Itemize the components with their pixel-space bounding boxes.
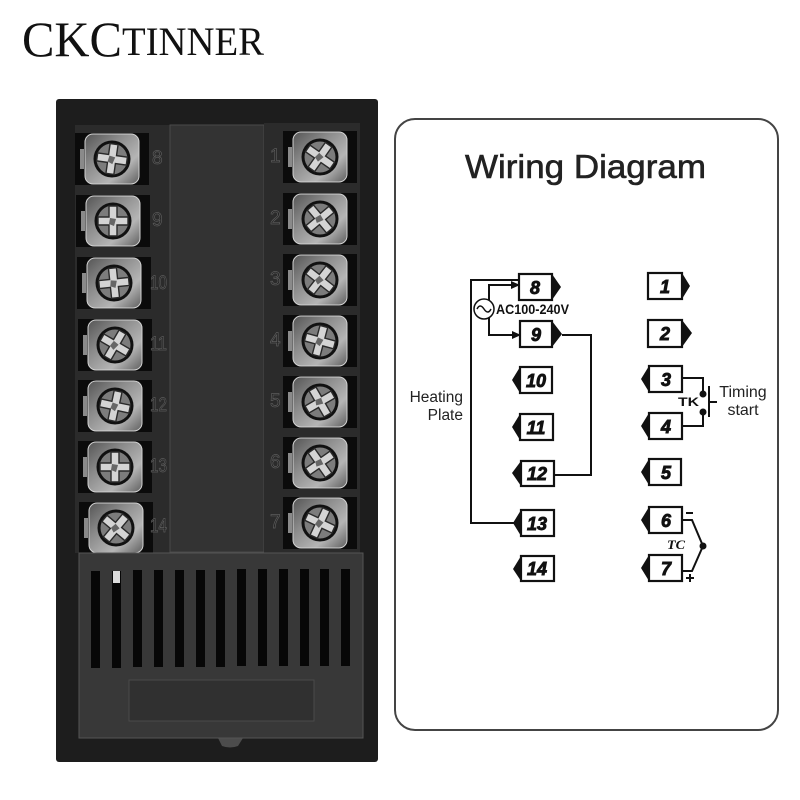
terminal 1 bbox=[648, 273, 690, 299]
right terminal strip: 1 bbox=[270, 146, 281, 167]
thermocouple input bbox=[667, 513, 706, 582]
terminal 5: 5 bbox=[661, 463, 672, 483]
wiring diagram panel bbox=[395, 119, 778, 730]
terminal 11: 11 bbox=[527, 418, 545, 438]
right terminal strip: 4 bbox=[270, 330, 281, 351]
terminal 13: 13 bbox=[527, 514, 547, 534]
terminal 14 bbox=[513, 556, 554, 581]
timing start switch: Timing bbox=[719, 384, 767, 401]
controller rear housing bbox=[56, 99, 378, 762]
AC supply wiring: AC100-240V bbox=[496, 301, 570, 317]
right terminal strip: 6 bbox=[270, 452, 281, 473]
terminal 9: 9 bbox=[531, 325, 541, 345]
terminal 4 bbox=[641, 413, 682, 439]
brand logo: CKC bbox=[22, 11, 122, 67]
terminal 12 bbox=[512, 461, 554, 486]
timing start switch: start bbox=[727, 402, 759, 419]
label: heating plate bbox=[410, 389, 463, 424]
terminal 8: 8 bbox=[530, 278, 540, 298]
left terminal strip: 8 bbox=[152, 148, 163, 169]
highlight speck bbox=[113, 571, 120, 583]
terminal 5 bbox=[641, 459, 681, 485]
latch notch bbox=[218, 738, 243, 748]
left terminal strip bbox=[75, 125, 170, 554]
thermocouple input: TC bbox=[667, 537, 685, 552]
terminal 13 bbox=[513, 510, 554, 536]
left terminal strip: 11 bbox=[150, 334, 167, 355]
right terminal strip: 2 bbox=[270, 208, 281, 229]
heating plate wiring bbox=[471, 280, 591, 523]
brand logo bbox=[22, 11, 264, 67]
left terminal strip: 10 bbox=[150, 273, 167, 294]
terminal 6: 6 bbox=[661, 511, 672, 531]
brand logo: TINNER bbox=[122, 19, 264, 64]
timing start switch bbox=[678, 378, 767, 426]
center panel bbox=[170, 125, 264, 552]
terminal 7 bbox=[641, 555, 682, 581]
terminal 14: 14 bbox=[527, 559, 547, 579]
right terminal strip bbox=[264, 123, 360, 553]
label: heating plate: Plate bbox=[428, 407, 463, 424]
ventilation slots bbox=[91, 569, 350, 668]
terminal 10 bbox=[512, 367, 552, 393]
terminal 2: 2 bbox=[659, 324, 670, 344]
left terminal strip: 12 bbox=[150, 395, 167, 416]
terminal 3 bbox=[641, 366, 682, 392]
terminal 6 bbox=[641, 507, 682, 533]
right terminal strip: 3 bbox=[270, 269, 281, 290]
left terminal strip: 14 bbox=[150, 516, 167, 537]
left terminal strip: 13 bbox=[150, 456, 167, 477]
terminal 2 bbox=[648, 320, 692, 347]
terminal 12: 12 bbox=[527, 464, 547, 484]
terminal 10: 10 bbox=[526, 371, 546, 391]
right terminal strip: 5 bbox=[270, 391, 281, 412]
label recess bbox=[129, 680, 314, 721]
terminal 11 bbox=[512, 414, 553, 440]
right terminal strip: 7 bbox=[270, 512, 281, 533]
terminal 3: 3 bbox=[661, 370, 671, 390]
label: heating plate: Heating bbox=[410, 389, 463, 406]
terminal 8 bbox=[519, 274, 561, 300]
timing start switch: TK bbox=[678, 395, 699, 409]
left terminal strip: 9 bbox=[152, 210, 163, 231]
terminal 4: 4 bbox=[660, 417, 671, 437]
heading: Wiring Diagram bbox=[465, 148, 706, 185]
vented cover bbox=[79, 553, 363, 738]
terminal 1: 1 bbox=[660, 277, 670, 297]
AC supply wiring bbox=[474, 281, 570, 339]
terminal 9 bbox=[520, 321, 562, 347]
terminal 7: 7 bbox=[661, 559, 672, 579]
